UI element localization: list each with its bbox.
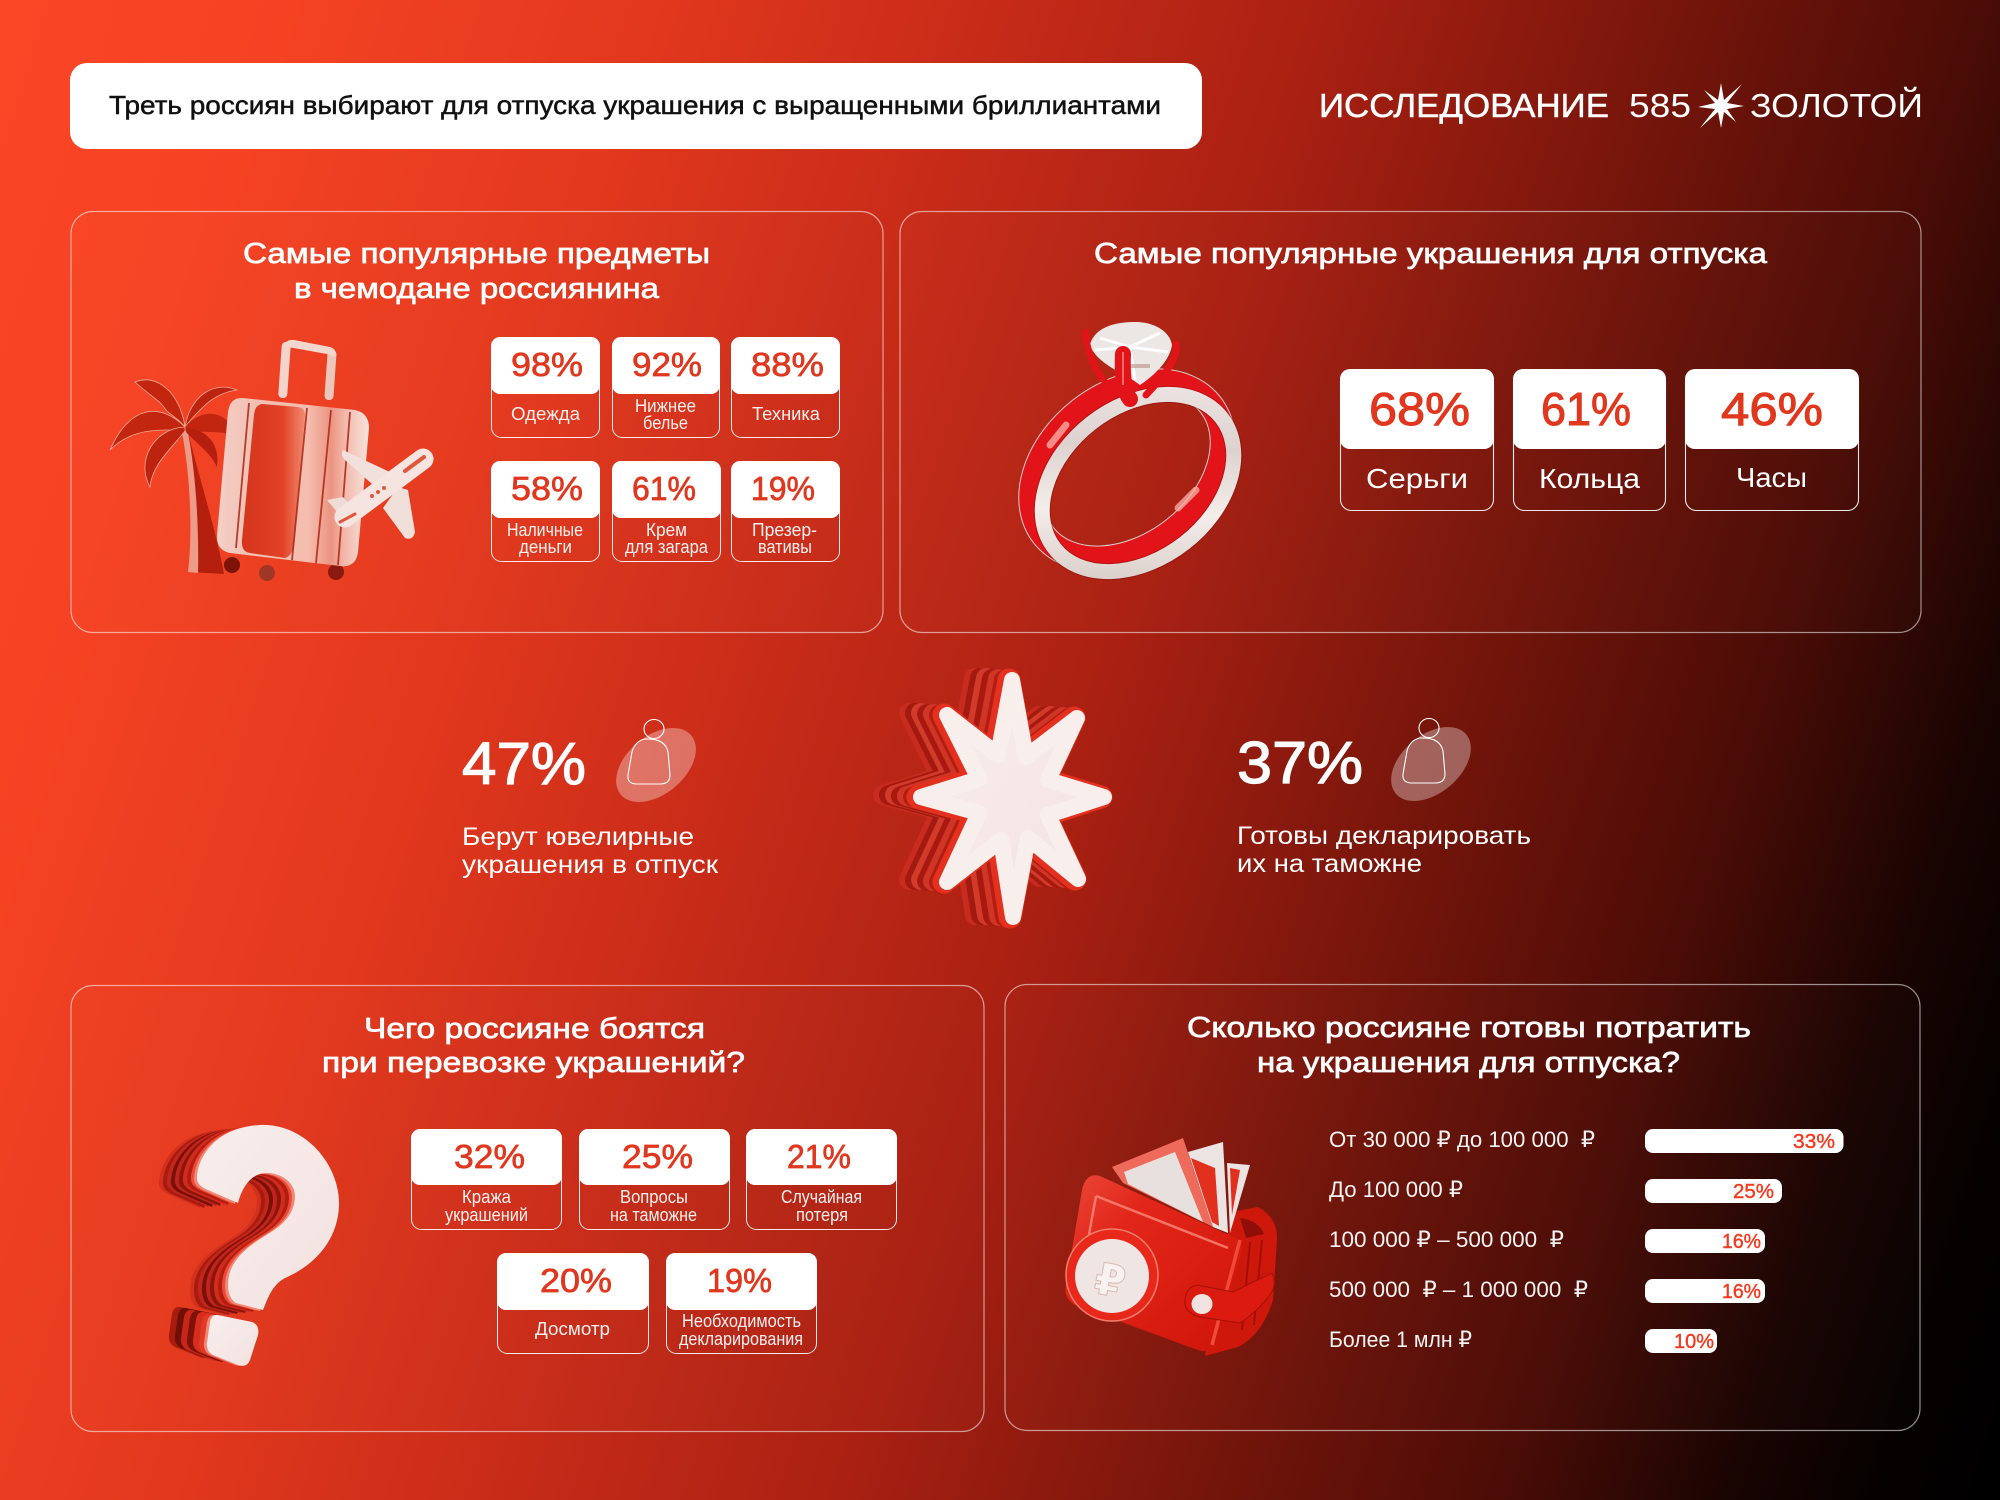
heading: spending: на украшения для отпуска?: [1257, 1047, 1680, 1079]
card: 19% need to declare: 19%: [707, 1262, 772, 1299]
stat: 47% take jewellery: 47%: [462, 731, 586, 797]
card: 68% earrings: Серьги: [1366, 463, 1468, 494]
heading: popular jewellery: Самые популярные украшения для отпуска: [1094, 238, 1768, 270]
card: 32% theft: [411, 1129, 562, 1230]
icon: wallet with money and coin: [1065, 1138, 1277, 1356]
row: 16%: 16%: [1722, 1231, 1761, 1253]
card: 25% customs questions: на таможне: [610, 1205, 697, 1225]
card: 25% customs questions: Вопросы: [620, 1187, 688, 1207]
stat: 47% take jewellery: [462, 713, 719, 879]
card: 61% sunscreen: для загара: [625, 537, 709, 557]
header: title bar: Треть россиян выбирают для отпуска украшения с выращенными бриллиантами: [109, 90, 1161, 120]
card: 58% cash: [491, 461, 600, 562]
bar chart: spending ranges: [1329, 1127, 1844, 1353]
card: 46% watches: Часы: [1736, 462, 1807, 493]
row: 16%: [1329, 1227, 1765, 1253]
card: 46% watches: [1685, 369, 1859, 510]
icon: 3D question mark: [159, 1125, 339, 1366]
icon: bag with tag: [1377, 712, 1485, 816]
header: title bar: [70, 63, 1202, 149]
row: 16%: [1329, 1277, 1765, 1303]
row: 10%: 10%: [1674, 1331, 1714, 1353]
card: 32% theft: украшений: [445, 1205, 528, 1225]
card: 88% electronics: Техника: [752, 404, 821, 424]
card: 58% cash: деньги: [519, 537, 572, 557]
row: 33%: 33%: [1793, 1131, 1835, 1153]
heading: suitcase items: в чемодане россиянина: [294, 273, 660, 305]
card: 61% sunscreen: [612, 461, 721, 562]
card: 61% rings: Кольца: [1539, 463, 1640, 494]
card: 20% inspection: 20%: [540, 1262, 612, 1299]
card: 61% rings: 61%: [1541, 383, 1631, 435]
card: 32% theft: Кража: [462, 1187, 512, 1207]
logo: research 585 gold: ИССЛЕДОВАНИЕ: [1319, 87, 1609, 124]
icon: wallet with money and coin: ₽: [1091, 1254, 1129, 1308]
row: 16%: 16%: [1722, 1281, 1761, 1303]
heading: fears: Чего россияне боятся: [364, 1013, 705, 1045]
stat: 37% ready to declare: Готовы декларировать: [1237, 822, 1531, 850]
card: 92% underwear: Нижнее: [635, 396, 696, 416]
card: 19% need to declare: [666, 1253, 817, 1354]
card: 19% need to declare: декларирования: [679, 1329, 803, 1349]
stat: 37% ready to declare: [1237, 712, 1531, 878]
card: 68% earrings: [1340, 369, 1494, 510]
card: 25% customs questions: 25%: [622, 1138, 693, 1175]
card: 19% condoms: вативы: [758, 537, 812, 557]
heading: fears: при перевозке украшений?: [322, 1047, 745, 1079]
row: 25%: [1329, 1177, 1782, 1203]
card: 25% customs questions: [579, 1129, 730, 1230]
card: 88% electronics: [731, 337, 840, 438]
card: 21% accidental loss: 21%: [787, 1138, 851, 1175]
logo: research 585 gold: 585: [1629, 87, 1691, 124]
card: 20% inspection: Досмотр: [535, 1319, 610, 1339]
card: 58% cash: 58%: [511, 470, 583, 507]
heading: spending: [1187, 1012, 1751, 1079]
stat: 37% ready to declare: 37%: [1237, 730, 1363, 796]
card: 32% theft: 32%: [454, 1138, 525, 1175]
row: 10%: [1329, 1327, 1717, 1353]
card: 61% sunscreen: 61%: [632, 470, 696, 507]
card: 92% underwear: [612, 337, 720, 438]
stat: 47% take jewellery: Берут ювелирные: [462, 823, 694, 851]
panel: popular jewellery: [900, 212, 1921, 632]
row: 16%: 100 000 ₽ – 500 000 ₽: [1329, 1227, 1564, 1252]
logo: research 585 gold: [1319, 83, 1923, 128]
heading: fears: [322, 1013, 745, 1079]
row: 25%: 25%: [1733, 1181, 1774, 1203]
icon: diamond ring: [997, 322, 1268, 608]
icon: palm, suitcase, plane: [110, 340, 424, 581]
card: 68% earrings: 68%: [1369, 383, 1470, 435]
card: 92% underwear: 92%: [632, 346, 702, 383]
card: 61% rings: [1513, 369, 1666, 510]
panel: spending: [1005, 984, 1920, 1430]
card: 21% accidental loss: Случайная: [781, 1187, 862, 1207]
heading: suitcase items: [243, 238, 710, 305]
card: 98% clothes: [491, 337, 600, 438]
card: 21% accidental loss: [746, 1129, 897, 1230]
row: 25%: До 100 000 ₽: [1329, 1177, 1463, 1202]
row: 33%: [1329, 1127, 1844, 1153]
card: 19% condoms: 19%: [751, 470, 815, 507]
card: 19% condoms: Презер-: [752, 520, 817, 540]
card: 98% clothes: Одежда: [511, 404, 581, 424]
row: 10%: Более 1 млн ₽: [1329, 1327, 1472, 1352]
heading: spending: Сколько россияне готовы потратить: [1187, 1012, 1751, 1044]
card: 61% sunscreen: Крем: [646, 520, 687, 540]
icon: bag with tag: [602, 713, 710, 817]
card: 19% need to declare: Необходимость: [682, 1311, 801, 1331]
heading: suitcase items: Самые популярные предметы: [243, 238, 710, 270]
stat: 47% take jewellery: украшения в отпуск: [462, 851, 719, 879]
card: 88% electronics: 88%: [751, 346, 824, 383]
row: 16%: 500 000 ₽ – 1 000 000 ₽: [1329, 1277, 1588, 1302]
panel: suitcase items: [71, 212, 883, 632]
card: 98% clothes: 98%: [511, 346, 583, 383]
stat: 37% ready to declare: их на таможне: [1237, 850, 1422, 878]
card: 92% underwear: белье: [643, 413, 688, 433]
logo: research 585 gold: ЗОЛОТОЙ: [1750, 87, 1923, 124]
card: 21% accidental loss: потеря: [796, 1205, 848, 1225]
card: 19% condoms: [731, 461, 840, 562]
icon: big 3D star: [883, 678, 1104, 917]
card: 58% cash: Наличные: [507, 520, 583, 540]
panel: fears: [71, 986, 984, 1432]
card: 20% inspection: [497, 1253, 649, 1354]
card: 46% watches: 46%: [1721, 383, 1823, 435]
row: 33%: От 30 000 ₽ до 100 000 ₽: [1329, 1127, 1595, 1152]
